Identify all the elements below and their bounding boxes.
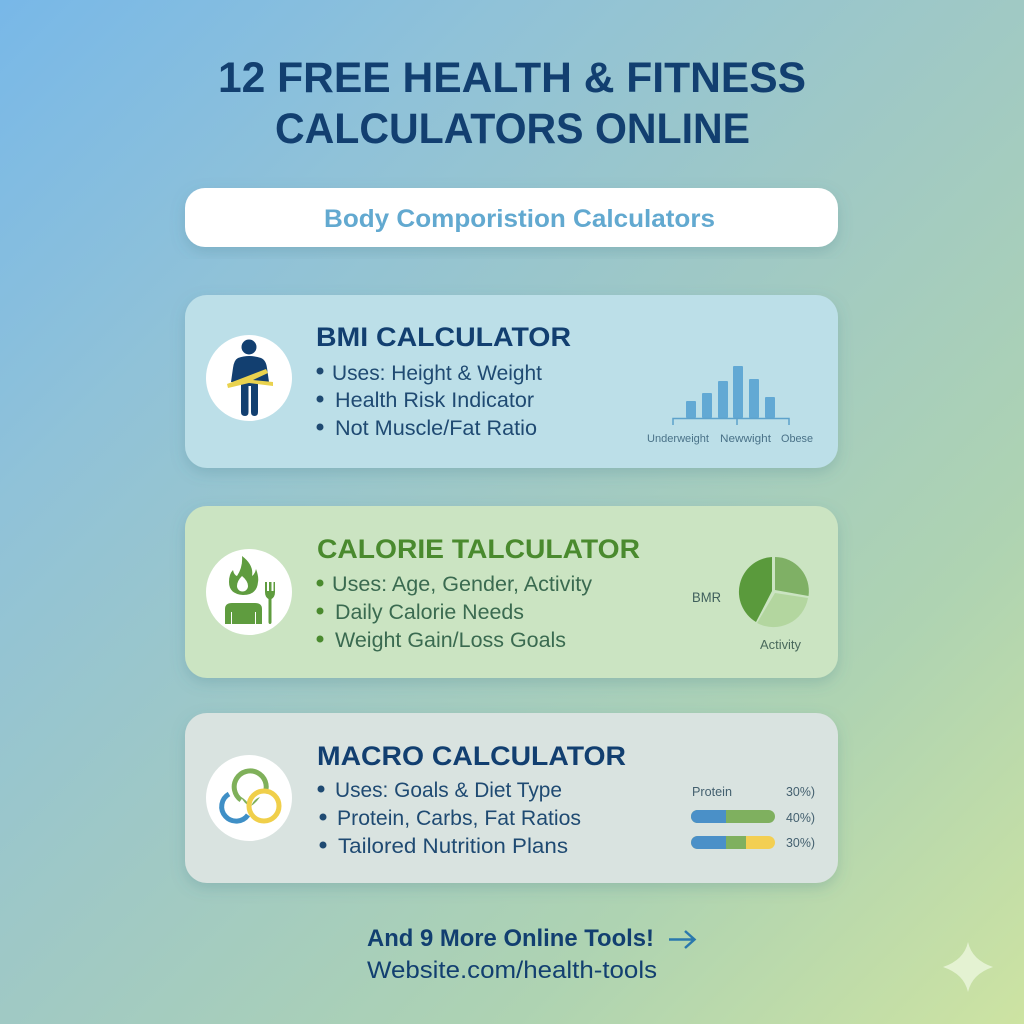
icon: person with measuring tape <box>206 335 292 421</box>
bar chart: BMI distribution: Obese <box>781 433 813 445</box>
heading: macro calculator: MACRO CALCULATOR <box>317 741 626 771</box>
panel: BMI calculator <box>185 295 838 468</box>
stacked bars: macro ratios: 30%) <box>786 784 815 799</box>
bullet list: BMI <box>316 362 542 440</box>
stacked bars: macro ratios: Protein <box>692 784 732 799</box>
heading: calorie calculator: CALORIE TALCULATOR <box>317 534 640 564</box>
bullet list: macro: Tailored Nutrition Plans <box>338 835 568 858</box>
bullet list: calorie: Weight Gain/Loss Goals <box>335 629 566 652</box>
arrow <box>669 931 694 948</box>
pie chart: calorie breakdown: Activity <box>760 637 801 652</box>
footer call to action <box>367 925 657 984</box>
footer call to action: And 9 More Online Tools! <box>367 925 654 952</box>
pie chart: calorie breakdown: BMR <box>692 589 721 605</box>
stacked bars: macro ratios: 40%) <box>786 810 815 825</box>
bullet list: macro: Protein, Carbs, Fat Ratios <box>337 807 581 830</box>
bullet list: BMI: Health Risk Indicator <box>335 389 534 412</box>
bullet list: BMI: Not Muscle/Fat Ratio <box>335 417 537 440</box>
section heading pill <box>185 188 838 247</box>
section heading pill: Body Comporistion Calculators <box>324 205 715 233</box>
title: 12 FREE HEALTH & FITNESS <box>218 54 806 102</box>
bullet list: BMI: Uses: Height & Weight <box>332 362 542 385</box>
stacked bars: macro ratios: 30%) <box>786 835 815 850</box>
bullet list: calorie: Uses: Age, Gender, Activity <box>332 573 593 596</box>
bullet list: macro: Uses: Goals & Diet Type <box>335 779 562 802</box>
icon: flame person and fork <box>206 549 292 635</box>
bar chart: BMI distribution: Newwight <box>720 433 771 445</box>
bullet list: calorie: Daily Calorie Needs <box>335 601 524 624</box>
bar chart: BMI distribution <box>647 366 813 445</box>
panel: calorie calculator <box>185 506 838 678</box>
icon: interlocking rings <box>206 755 292 841</box>
stacked bars: macro ratios <box>691 784 815 850</box>
bullet list: calorie <box>316 573 593 652</box>
title <box>218 54 806 153</box>
pie chart: calorie breakdown <box>692 557 809 652</box>
bar chart: BMI distribution: Underweight <box>647 433 709 445</box>
bullet list: macro <box>318 779 581 858</box>
title: CALCULATORS ONLINE <box>275 105 750 153</box>
panel: macro calculator <box>185 713 838 883</box>
footer call to action: Website.com/health-tools <box>367 957 657 984</box>
heading: BMI calculator: BMI CALCULATOR <box>316 322 571 352</box>
icon: sparkle <box>943 942 993 992</box>
